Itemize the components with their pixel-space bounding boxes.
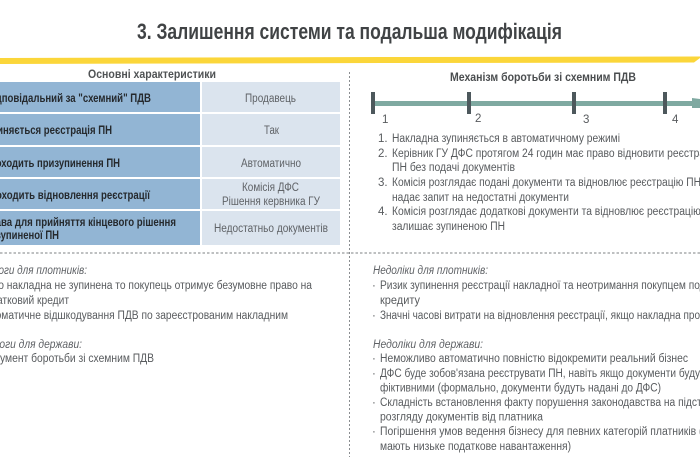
title: 3. Залишення системи та подальша модифікація bbox=[137, 19, 562, 44]
disadvantages for payers bbox=[372, 265, 700, 322]
panel: advantages bbox=[0, 265, 313, 365]
disadvantages for state: · bbox=[372, 353, 376, 365]
table: Недостатньо документів bbox=[214, 223, 328, 235]
table: Так bbox=[264, 125, 280, 137]
disadvantages for payers: кредиту bbox=[380, 295, 420, 307]
numbered steps: 3. bbox=[378, 177, 388, 189]
disadvantages for state: · bbox=[372, 397, 376, 409]
numbered steps: ПН без подачі документів bbox=[392, 162, 515, 174]
advantages for state bbox=[0, 339, 154, 365]
disadvantages for payers: Недоліки для плотників: bbox=[373, 265, 488, 277]
numbered steps: 2. bbox=[378, 148, 388, 160]
disadvantages for state: мають низьке податкове навантаження) bbox=[380, 441, 571, 453]
disadvantages for state: · bbox=[372, 426, 376, 438]
panel: main characteristics bbox=[0, 67, 340, 245]
table: Продавець bbox=[245, 93, 296, 105]
numbered steps: 1. bbox=[378, 133, 388, 145]
disadvantages for state: розгляду документів від платника bbox=[380, 412, 544, 424]
heading: mechanism: Механізм боротьби зі схемним ПДВ bbox=[450, 70, 636, 84]
numbered steps: Накладна зупиняється в автоматичному режимі bbox=[392, 133, 620, 145]
disadvantages for state: фіктивними (формально, документи будуть надані до ДФС) bbox=[380, 382, 661, 394]
table: Комісія ДФС bbox=[242, 182, 299, 194]
numbered steps bbox=[378, 133, 700, 233]
disadvantages for payers: · bbox=[372, 280, 376, 292]
disadvantages for payers: · bbox=[372, 310, 376, 322]
numbered steps: залишає зупиненою ПН bbox=[392, 221, 505, 233]
timeline arrow: 2 bbox=[475, 113, 481, 125]
disadvantages for state: Недоліки для держави: bbox=[373, 339, 483, 351]
timeline arrow: 1 bbox=[382, 114, 388, 126]
table bbox=[0, 82, 340, 245]
disadvantages for state: · bbox=[372, 368, 376, 380]
table: Автоматично bbox=[241, 158, 301, 170]
numbered steps: надає запит на недостатні документи bbox=[392, 192, 569, 204]
numbered steps: 4. bbox=[378, 206, 388, 218]
timeline arrow: 4 bbox=[672, 114, 679, 126]
panel: mechanism bbox=[371, 70, 700, 233]
advantages for payers bbox=[0, 265, 313, 322]
timeline arrow bbox=[371, 92, 700, 126]
table: Рішення кервника ГУ bbox=[222, 196, 321, 208]
panel: disadvantages bbox=[372, 265, 700, 453]
timeline arrow: 3 bbox=[583, 114, 589, 126]
disadvantages for state bbox=[372, 339, 700, 453]
yellow header band bbox=[0, 56, 700, 64]
heading: main characteristics: Основні характеристики bbox=[88, 67, 216, 81]
